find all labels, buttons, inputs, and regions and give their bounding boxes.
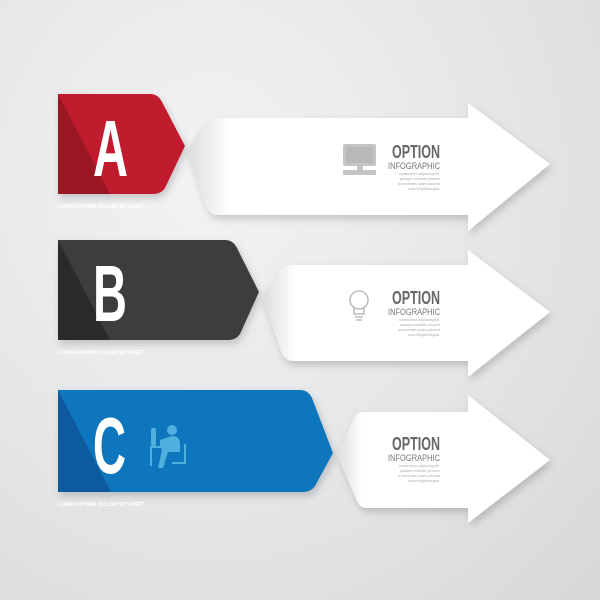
text B: at venenatis quam placerat xyxy=(398,328,440,332)
label B: LOREM IPSUM DOLOR SIT AMET xyxy=(58,350,145,356)
text C: OPTION xyxy=(392,434,440,454)
text A: quisque molestie posuere xyxy=(400,177,440,181)
text A: INFOGRAPHIC xyxy=(388,161,440,171)
text A: OPTION xyxy=(392,142,440,162)
text C: quisque molestie posuere xyxy=(400,469,440,473)
text B: INFOGRAPHIC xyxy=(388,307,440,317)
panel: option C xyxy=(58,390,550,523)
label C: LOREM IPSUM DOLOR SIT AMET xyxy=(58,502,145,508)
text A: consectetur adipiscing elit. xyxy=(399,172,440,176)
arrow B xyxy=(262,250,550,377)
text C xyxy=(388,434,440,483)
label A: LOREM IPSUM DOLOR SIT AMET xyxy=(58,204,145,210)
text B: quisque molestie posuere xyxy=(400,323,440,327)
text C: INFOGRAPHIC xyxy=(388,453,440,463)
panel: option A xyxy=(58,94,550,231)
icon: person at desk xyxy=(150,425,186,468)
text C: consectetur adipiscing elit. xyxy=(399,464,440,468)
arrow C xyxy=(337,395,550,523)
text A xyxy=(388,142,440,191)
letter A: A xyxy=(93,104,128,193)
tab A xyxy=(58,94,185,194)
icon: monitor xyxy=(343,144,376,175)
icon: light bulb xyxy=(350,291,368,320)
letter B: B xyxy=(93,249,127,338)
text B xyxy=(388,288,440,337)
letter C: C xyxy=(93,401,126,490)
tab B xyxy=(58,240,259,340)
arrow A xyxy=(187,103,550,231)
text A: nunc fringilla feugiat. xyxy=(408,187,440,191)
text C: nunc fringilla feugiat. xyxy=(408,479,440,483)
text C: at venenatis quam placerat xyxy=(398,474,440,478)
text A: at venenatis quam placerat xyxy=(398,182,440,186)
panel: option B xyxy=(58,240,550,377)
text B: nunc fringilla feugiat. xyxy=(408,333,440,337)
text B: OPTION xyxy=(392,288,440,308)
text B: consectetur adipiscing elit. xyxy=(399,318,440,322)
tab C xyxy=(58,390,333,492)
